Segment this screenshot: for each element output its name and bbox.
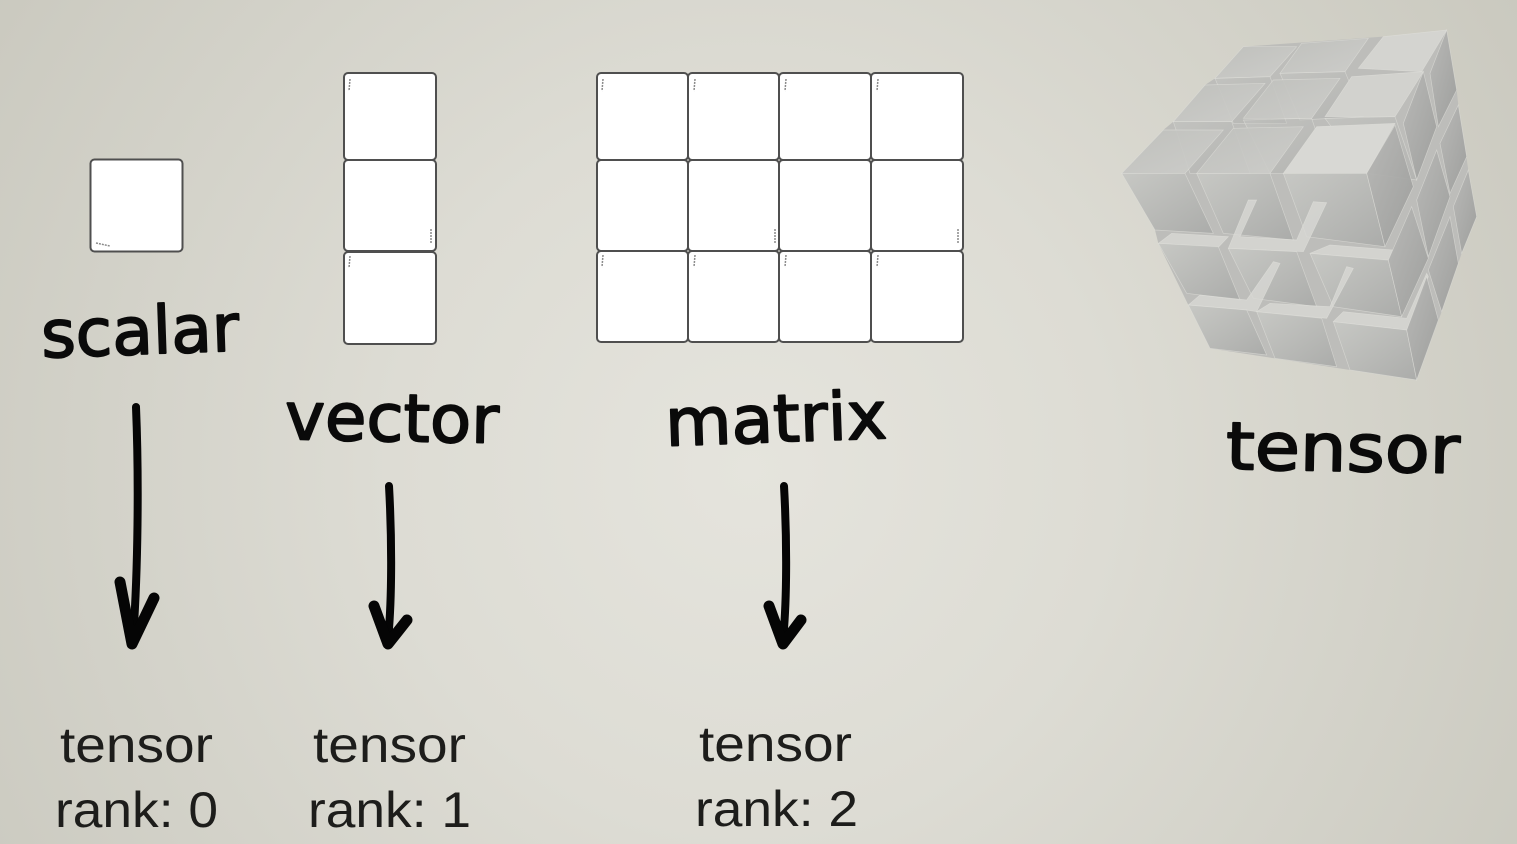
matrix grid bbox=[597, 73, 963, 342]
vector grid bbox=[344, 73, 436, 344]
label: vector: vector bbox=[284, 378, 501, 459]
scalar grid bbox=[90, 160, 182, 252]
label: tensor: tensor bbox=[1225, 408, 1462, 489]
label: matrix: matrix bbox=[664, 377, 888, 462]
text: tensor rank 0: tensor bbox=[60, 717, 213, 773]
text: tensor rank 2: rank: 2 bbox=[695, 781, 858, 837]
label: scalar: scalar bbox=[40, 290, 241, 373]
text: tensor rank 0: rank: 0 bbox=[55, 782, 218, 838]
text: tensor rank 2: tensor bbox=[699, 716, 852, 772]
text: tensor rank 2 bbox=[695, 716, 858, 837]
arrow: vector to rank 1 bbox=[374, 486, 407, 644]
text: tensor rank 1: tensor bbox=[313, 717, 466, 773]
tensor cube bbox=[1122, 30, 1477, 380]
text: tensor rank 1 bbox=[308, 717, 471, 838]
text: tensor rank 0 bbox=[55, 717, 218, 838]
arrow: matrix to rank 2 bbox=[769, 486, 801, 644]
text: tensor rank 1: rank: 1 bbox=[308, 782, 471, 838]
arrow: scalar to rank 0 bbox=[120, 407, 154, 644]
